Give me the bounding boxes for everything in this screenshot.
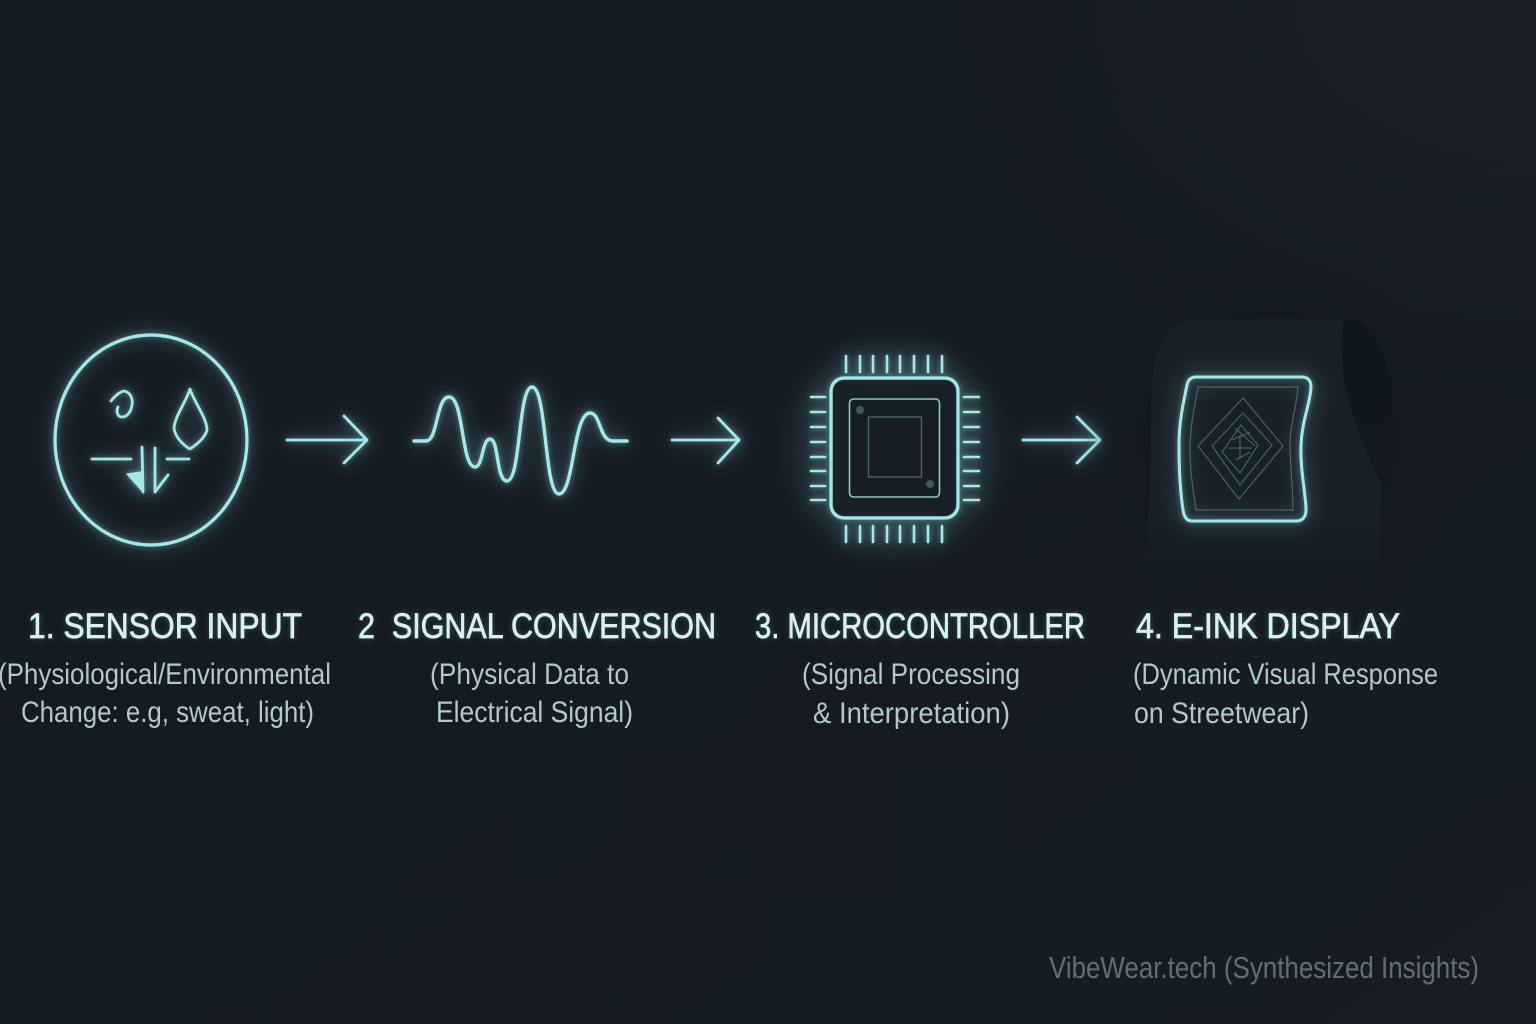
e-ink diamond pattern — [1198, 398, 1283, 499]
description: e-ink display: (Dynamic Visual Response — [1133, 658, 1438, 691]
description: microcontroller: (Signal Processing — [802, 658, 1020, 691]
e-ink panel — [1179, 377, 1311, 521]
description: sensor input — [0, 658, 331, 729]
garment back fold — [1340, 320, 1391, 590]
chip pins — [811, 356, 979, 542]
chip core — [868, 417, 922, 477]
e-ink frame — [1190, 387, 1298, 510]
chip inner die — [850, 399, 940, 497]
step 3 label — [755, 607, 1085, 730]
icon: signal waveform — [414, 387, 627, 494]
icon: streetwear garment with e-ink display — [1080, 250, 1460, 630]
description: signal conversion — [430, 658, 633, 729]
description: signal conversion: (Physical Data to — [430, 658, 629, 691]
heading: sensor input: 1. SENSOR INPUT — [28, 607, 302, 646]
arrow: signal to microcontroller — [672, 418, 739, 463]
arrow: sensor to signal — [287, 416, 367, 463]
step 2 label — [358, 607, 716, 729]
heading: microcontroller: 3. MICROCONTROLLER — [755, 607, 1085, 646]
icon: microcontroller chip — [769, 323, 1019, 573]
garment front — [1143, 319, 1381, 590]
step 4 label — [1133, 607, 1438, 730]
chip package outline — [831, 378, 958, 518]
description: microcontroller: & Interpretation) — [813, 697, 1010, 730]
step 1 label — [0, 607, 331, 729]
icon: sensor input circle — [55, 335, 247, 545]
chip body fill — [833, 380, 956, 516]
heading: signal conversion: 2 SIGNAL CONVERSION — [358, 607, 716, 646]
description: sensor input: (Physiological/Environmental — [0, 658, 331, 691]
heading: e-ink display: 4. E-INK DISPLAY — [1136, 607, 1400, 646]
shade behind garment — [1080, 250, 1460, 630]
description: sensor input: Change: e.g, sweat, light) — [21, 696, 314, 729]
description: signal conversion: Electrical Signal) — [436, 696, 633, 729]
chip corner dots — [856, 406, 934, 488]
description: microcontroller — [802, 658, 1020, 730]
arrow: microcontroller to display — [1023, 417, 1100, 463]
description: e-ink display: on Streetwear) — [1134, 697, 1309, 730]
description: e-ink display — [1133, 658, 1438, 730]
